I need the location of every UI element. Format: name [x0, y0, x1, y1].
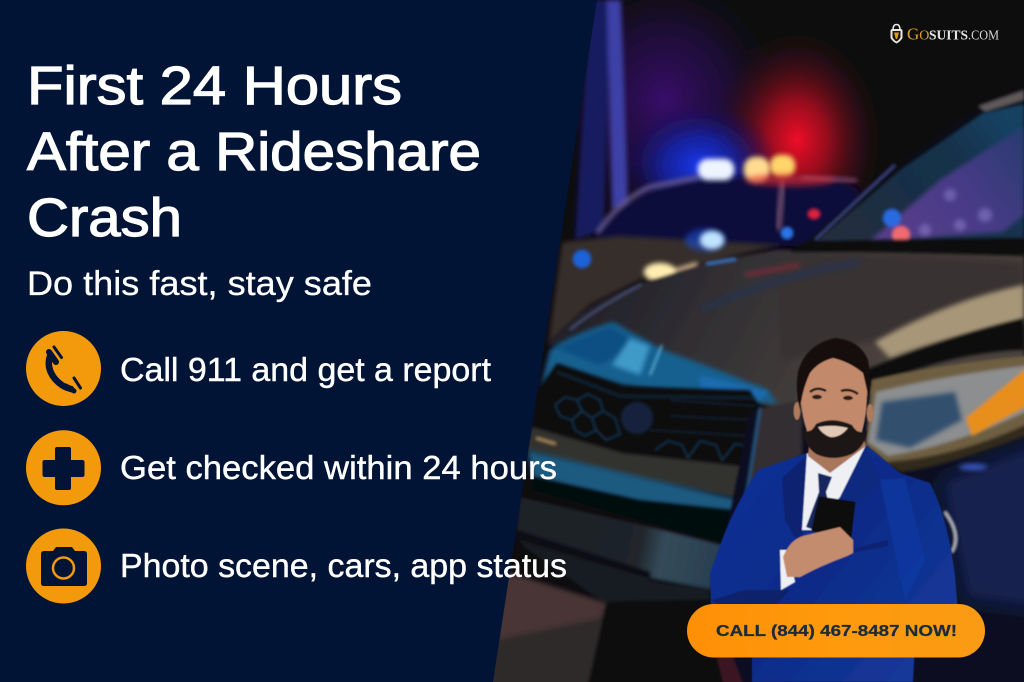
step 2: get checked	[26, 430, 557, 505]
logo wordmark: GO	[907, 24, 929, 44]
call to action button	[687, 604, 985, 658]
suit	[710, 445, 958, 682]
step 1: call 911	[26, 331, 491, 406]
grille	[533, 363, 760, 467]
title: After a Rideshare	[27, 122, 481, 182]
ears	[794, 402, 874, 422]
logo: Gosuits.com	[890, 24, 999, 44]
title	[27, 56, 481, 248]
headlight	[866, 355, 1024, 472]
step 3: take photos	[26, 528, 567, 604]
car hood	[548, 238, 1024, 410]
bumper bands	[516, 427, 750, 604]
car windshield	[803, 90, 1024, 250]
crumpled blue panel	[540, 322, 778, 404]
tie	[806, 473, 832, 530]
shirt and collar	[802, 445, 866, 530]
hair	[797, 338, 870, 410]
step text: Call 911 and get a report	[120, 351, 491, 388]
logo wordmark	[907, 24, 999, 44]
smile	[818, 426, 848, 437]
logo wordmark: SUITS	[929, 28, 968, 42]
icon: camera	[26, 528, 101, 604]
neck	[808, 425, 866, 473]
icon: medical cross	[26, 430, 101, 505]
panel: navy text panel	[0, 0, 597, 682]
head	[800, 350, 867, 452]
panel: crash scene photo	[470, 0, 1024, 682]
phone	[813, 498, 854, 537]
car side body	[712, 395, 1024, 682]
beard	[802, 420, 867, 458]
background light glows	[555, 0, 882, 250]
logo wordmark: .COM	[968, 28, 999, 42]
road	[480, 572, 760, 682]
hand	[783, 527, 853, 577]
eyebrows and eyes	[810, 389, 858, 400]
street light pole	[575, 0, 628, 240]
shirt cuff	[780, 550, 795, 590]
subtitle: Do this fast, stay safe	[27, 265, 372, 303]
step text: Get checked within 24 hours	[120, 449, 557, 486]
suit lapels and shading	[712, 445, 925, 620]
call to action button: CALL (844) 467-8487 NOW!	[716, 623, 957, 640]
icon: padlock	[890, 24, 902, 44]
police car	[548, 155, 860, 345]
icon: phone	[26, 331, 101, 406]
title: Crash	[27, 188, 182, 248]
step text: Photo scene, cars, app status	[120, 547, 567, 584]
title: First 24 Hours	[27, 56, 402, 116]
person: attorney holding a phone	[710, 338, 958, 682]
